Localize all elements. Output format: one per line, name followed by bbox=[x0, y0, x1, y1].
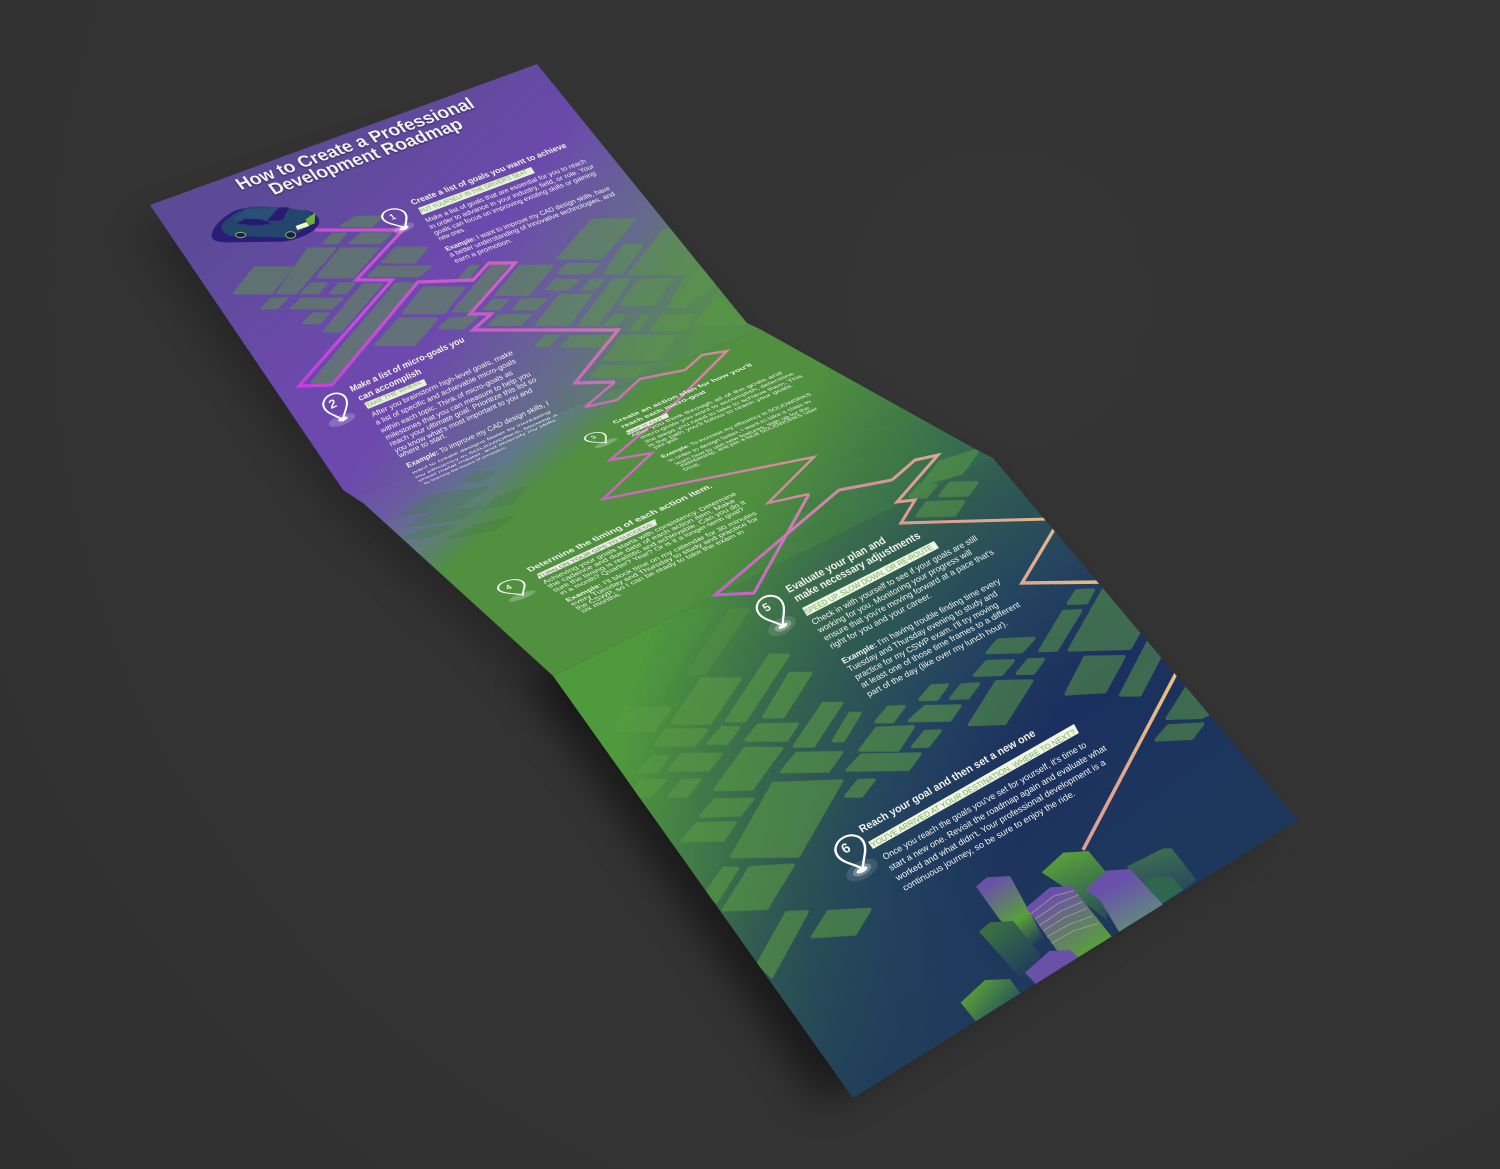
body text: Example: I'll block time on my calendar for 30 minutes bbox=[564, 511, 760, 603]
tag bbox=[537, 519, 657, 579]
panel: top shading bbox=[150, 64, 558, 354]
body text bbox=[630, 371, 820, 472]
icon: pin 2 bbox=[320, 390, 357, 429]
body text: a better understanding of innovative technologies, and bbox=[448, 191, 617, 259]
body text: sheet metal master, and diversify my skills bbox=[417, 418, 556, 483]
purple right tower bbox=[1086, 869, 1163, 933]
tag bbox=[626, 413, 669, 435]
icon: pin 4 bbox=[494, 577, 536, 604]
body text: right for you and your career. bbox=[827, 591, 934, 651]
icon: pin 1: 1 bbox=[387, 212, 398, 222]
body text: your goal. bbox=[652, 436, 682, 450]
tag bbox=[418, 167, 535, 215]
body text: After you think through all of the goals and bbox=[630, 371, 784, 438]
body text: worked and what didn't. Your professional development is a bbox=[893, 757, 1108, 883]
paper shadow: upper bbox=[139, 100, 987, 706]
heading: can accomplish bbox=[356, 366, 423, 403]
body text: goals can focus on improving existing skills or gaining bbox=[432, 171, 598, 237]
step 4 bbox=[525, 483, 761, 614]
body text bbox=[424, 159, 617, 265]
body text: in order to advance in your industry, field, or role. Your bbox=[428, 163, 597, 231]
map blocks: bottom panel right bbox=[910, 450, 1210, 740]
tall left tower bbox=[976, 876, 1047, 944]
body text bbox=[809, 533, 1023, 699]
panel: middle green bbox=[353, 329, 993, 676]
map blocks: middle panel (faint) bbox=[400, 471, 515, 540]
road route continued bbox=[1022, 526, 1105, 583]
icon: pin 2: 2 bbox=[326, 396, 339, 412]
bottom purple building bbox=[1025, 950, 1078, 985]
body text: membership, and join a local SOLIDWORKS User bbox=[679, 407, 820, 468]
body text: Example: I want to improve my CAD design skills, have bbox=[444, 186, 612, 253]
car roof bbox=[233, 207, 278, 221]
tag bbox=[802, 541, 939, 616]
icon: pin 6 bbox=[830, 830, 881, 886]
icon: pin 3 bbox=[581, 430, 618, 450]
body text: part of the day (like over my lunch hour). bbox=[864, 618, 1010, 699]
heading: Evaluate your plan and bbox=[784, 535, 888, 595]
body text bbox=[541, 491, 761, 614]
body text: Group. bbox=[682, 462, 702, 472]
body text: micro-goals you want to accomplish, determine bbox=[639, 372, 797, 440]
heading: Reach your goal and then set a new one bbox=[857, 728, 1038, 835]
body text: start a new one. Revisit the roadmap again and evaluate what bbox=[887, 743, 1109, 873]
body text: Once you reach the goals you've set for yourself, it's time to bbox=[881, 740, 1088, 862]
road to destination bbox=[1083, 666, 1180, 850]
icon: pin 6: 6 bbox=[838, 839, 854, 856]
green tower bbox=[1042, 851, 1110, 920]
far building bbox=[1126, 848, 1196, 890]
body text: in order to design faster, I want to take a class to bbox=[667, 400, 814, 463]
green grille bbox=[305, 213, 315, 225]
heading: Create a list of goals you want to achieve bbox=[409, 141, 569, 207]
heading: reach each micro-goal bbox=[619, 390, 708, 429]
body text: Make a list of goals that are essential for you to reach bbox=[424, 159, 589, 224]
icon: car bbox=[212, 206, 319, 242]
body text: six months. bbox=[579, 591, 625, 614]
tag bbox=[868, 724, 1079, 849]
body text: want to create designs faster by increasing bbox=[411, 410, 552, 475]
windshield bbox=[267, 207, 289, 222]
tag text: TAKE THE WHEEL bbox=[365, 380, 423, 409]
front wheel bbox=[286, 232, 296, 238]
tag text: SPEED UP, SLOW DOWN, OR RE-ROUTE bbox=[802, 543, 935, 616]
icon: pin 5: 5 bbox=[759, 600, 774, 614]
step 3 bbox=[611, 363, 820, 472]
body text: Check in with yourself to see if your goals are still bbox=[809, 533, 980, 627]
body text: new ones. bbox=[437, 227, 468, 242]
headlight bbox=[296, 222, 309, 230]
body text: by learning the basics of simulation. bbox=[423, 445, 508, 485]
city skyline destination bbox=[961, 848, 1197, 1022]
map blocks: bottom panel left bbox=[607, 610, 960, 977]
tag text: MAP IT OUT bbox=[626, 417, 665, 435]
car body bbox=[222, 206, 315, 237]
back small building bbox=[1143, 877, 1183, 905]
tag text: PUT YOURSELF IN THE DRIVER'S SEAT bbox=[418, 169, 530, 215]
body text: at least one of those time frames to a different bbox=[858, 599, 1023, 690]
folded paper bbox=[150, 64, 1298, 1098]
bottom left green building bbox=[961, 979, 1021, 1022]
body text: the CSWP, so I can be ready to take the exam in bbox=[574, 529, 747, 611]
car shadow bbox=[212, 207, 319, 242]
body text: is the path you'll follow to reach your goals. bbox=[647, 384, 796, 448]
icon: pin 5 bbox=[752, 592, 799, 640]
heading bbox=[611, 363, 755, 429]
road route bbox=[299, 230, 1048, 595]
tag text: TURN ON YOUR GPS TO SUCCESS bbox=[537, 523, 656, 579]
striped central tower bbox=[1026, 886, 1112, 957]
body text: Example: To improve my CAD design skills, I bbox=[405, 400, 551, 470]
body text: Example: To increase my efficiency in SOLIDWORKS bbox=[660, 393, 814, 459]
body text: reach your ultimate goal. Prioritize this list so bbox=[388, 376, 538, 448]
title: Development Roadmap bbox=[264, 115, 467, 198]
body text: the cadence and due date of each action item. Make bbox=[546, 498, 738, 589]
body text: After you brainstorm high-level goals, make bbox=[370, 349, 515, 419]
step 6 bbox=[857, 724, 1109, 893]
icon: pin 1 bbox=[378, 206, 416, 236]
body text: learn how to use new features, sign up for the bbox=[674, 406, 813, 466]
body text: earn a promotion. bbox=[453, 238, 514, 265]
body text: in a month? Quarter? Year? Or is it a longer-term goal? bbox=[558, 507, 747, 596]
body text: sure the timing is realistic and achievable. Can you do it bbox=[551, 500, 748, 593]
body text: a list of specific and achievable micro-goals bbox=[374, 357, 518, 427]
body text: every Tuesday and Thursday to study and practice for bbox=[569, 516, 761, 607]
body text: practice for my CSWP exam. I'll try moving bbox=[852, 600, 1000, 682]
icon: pin 3: 3 bbox=[590, 435, 599, 440]
step 5 bbox=[784, 530, 1023, 699]
panel: top purple bbox=[150, 64, 760, 498]
body text: milestones that you can measure to help you bbox=[384, 370, 532, 442]
body text: Achieving your goals starts with consistency. Determine bbox=[541, 491, 739, 585]
title: How to Create a Professional bbox=[231, 94, 478, 193]
body text: ensure that you're moving forward at a pace that's bbox=[821, 547, 996, 643]
dark green left tower bbox=[979, 921, 1041, 983]
body text: you know what's most important to you and bbox=[393, 387, 534, 455]
map blocks: top panel bbox=[234, 217, 748, 383]
body text: my efficiency in SOLIDWORKS, become a bbox=[414, 412, 559, 479]
body text: continuous journey, so be sure to enjoy the ride. bbox=[901, 789, 1077, 893]
icon: pin 4: 4 bbox=[503, 583, 514, 591]
panel: bottom navy bbox=[553, 458, 1298, 1098]
side window bbox=[237, 219, 272, 226]
panel: middle right darkening bbox=[741, 383, 992, 582]
body text: within each topic. Think of micro-goals as bbox=[378, 369, 515, 435]
body text bbox=[370, 349, 559, 485]
body text: working for you. Monitoring your progress will bbox=[814, 547, 974, 635]
paper shadow: lower bbox=[529, 472, 1266, 1104]
body text: Tuesday and Thursday evening to study and bbox=[845, 589, 1000, 674]
step 2 bbox=[348, 335, 559, 485]
rear wheel bbox=[236, 232, 246, 238]
heading: Determine the timing of each action item. bbox=[525, 483, 715, 573]
heading: Create an action plan for how you'll bbox=[611, 363, 755, 425]
heading: make necessary adjustments bbox=[792, 530, 923, 604]
step 1 bbox=[409, 141, 617, 265]
panel: bottom tip darkening bbox=[724, 721, 1298, 1098]
tag bbox=[364, 379, 427, 409]
body text: Example: I'm having trouble finding time every bbox=[839, 576, 1003, 666]
body text: where to start. bbox=[396, 432, 449, 460]
body text: the steps you need to take to achieve them. This bbox=[644, 375, 805, 444]
tag text: YOU'VE ARRIVED AT YOUR DESTINATION. WHERE TO NEXT? bbox=[869, 727, 1078, 849]
heading: Make a list of micro-goals you bbox=[348, 335, 466, 394]
